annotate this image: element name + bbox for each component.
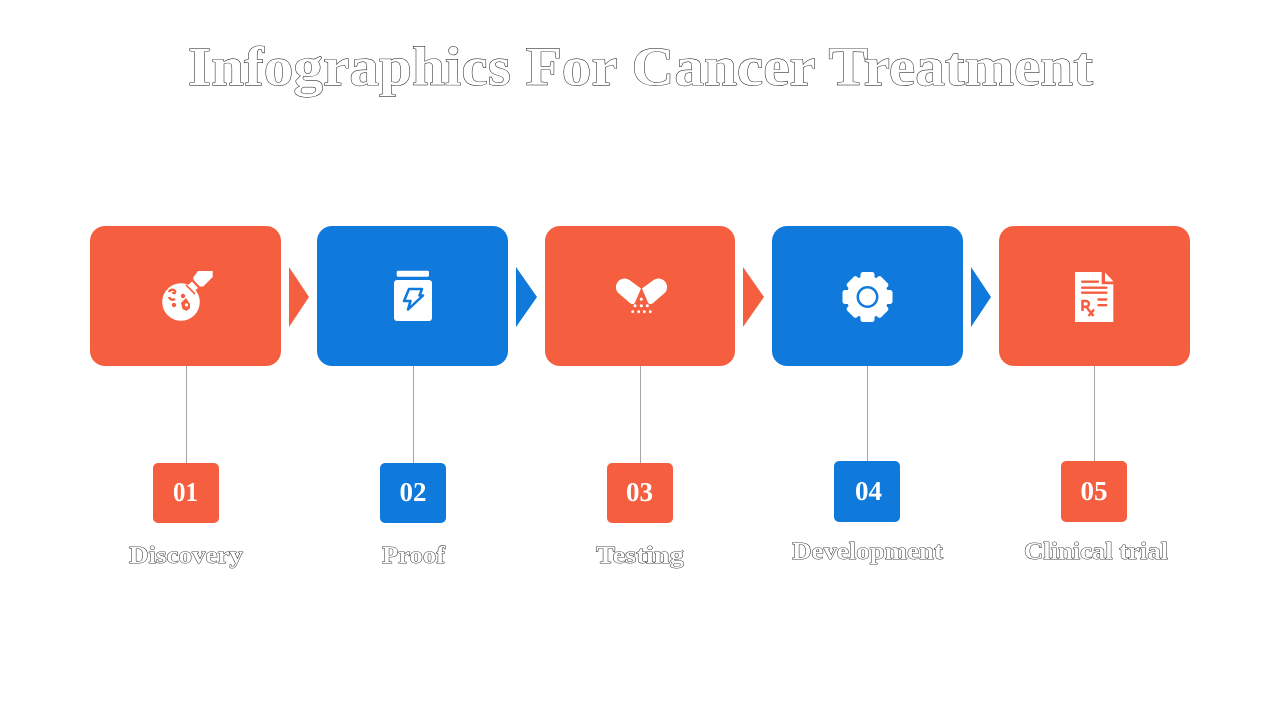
panel: clinical trial card: [999, 226, 1190, 366]
step 1: discovery: [90, 226, 309, 569]
icon: open capsule: [616, 279, 667, 313]
title: Infographics For Cancer Treatment: [188, 36, 1094, 97]
step 5: clinical trial: [999, 226, 1190, 565]
connector line 3: [640, 365, 641, 464]
step 2: proof: [317, 226, 537, 569]
number badge 02: 02: [400, 477, 426, 507]
panel: proof card: [317, 226, 508, 366]
connector line 2: [413, 365, 414, 464]
number badge 02: [380, 463, 446, 523]
connector line 5: [1094, 365, 1095, 462]
icon: cell and dropper: [162, 271, 213, 321]
number badge 03: [607, 463, 673, 523]
panel: discovery card: [90, 226, 281, 366]
connector line 4: [867, 365, 868, 462]
number badge 04: 04: [855, 476, 882, 506]
label: Development: Development: [792, 539, 943, 565]
number badge 05: 05: [1080, 476, 1108, 506]
panel: testing card: [545, 226, 735, 366]
panel: development card: [772, 226, 963, 366]
icon: gear: [842, 272, 892, 322]
arrow 1: [289, 267, 309, 327]
number badge 05: [1061, 461, 1127, 522]
step 4: development: [772, 226, 991, 565]
arrow 4: [971, 267, 991, 327]
number badge 04: [834, 461, 900, 522]
icon: jar with bolt: [394, 271, 432, 321]
number badge 01: [153, 463, 219, 523]
number badge 01: 01: [173, 477, 198, 507]
label: Clinical trial: Clinical trial: [1024, 539, 1168, 565]
icon: prescription document: [1075, 272, 1114, 322]
arrow 2: [516, 267, 537, 327]
step 3: testing: [545, 226, 764, 569]
connector line 1: [186, 365, 187, 464]
label: Discovery: Discovery: [129, 543, 243, 569]
arrow 3: [743, 267, 764, 327]
number badge 03: 03: [626, 477, 653, 507]
label: Proof: Proof: [382, 543, 446, 569]
label: Testing: Testing: [596, 543, 684, 569]
